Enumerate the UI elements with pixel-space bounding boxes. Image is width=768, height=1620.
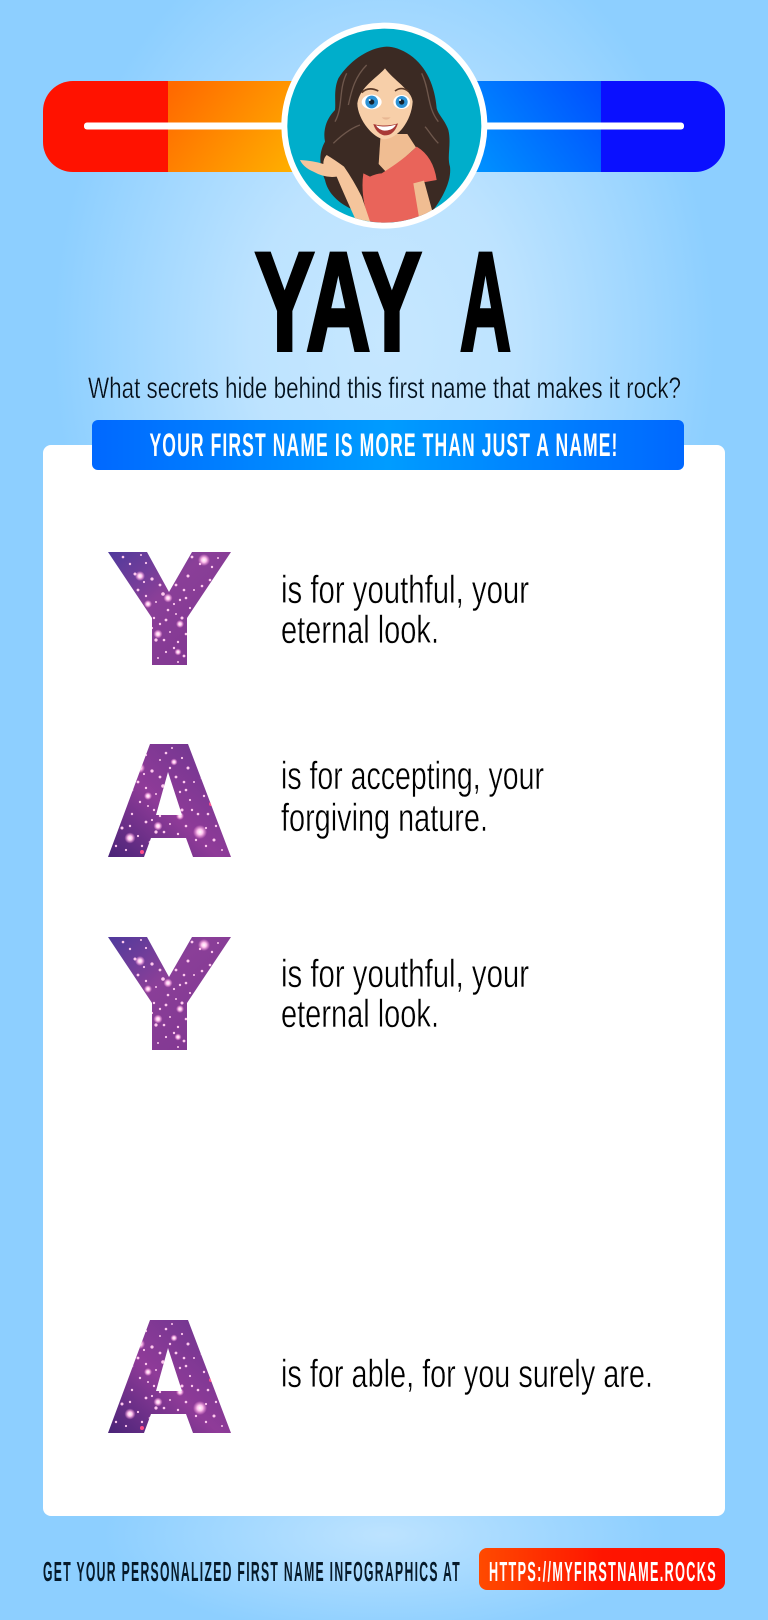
- title: YAY: [255, 223, 421, 380]
- footer url button: [479, 1548, 725, 1590]
- text: accepting: is for accepting, your: [281, 755, 544, 798]
- icon: galaxy letter Y: [108, 552, 231, 665]
- text: youthful: eternal look.: [281, 993, 439, 1036]
- text: youthful: eternal look.: [281, 609, 439, 652]
- letter row: Y youthful second: [108, 937, 529, 1050]
- icon: galaxy letter Y: [108, 937, 231, 1050]
- avatar: woman in teal circle: [284, 26, 484, 226]
- icon: galaxy letter A: [108, 1320, 231, 1433]
- text: youthful: is for youthful, your: [281, 569, 529, 612]
- letter row: Y youthful: [108, 552, 529, 665]
- icon: galaxy letter A: [108, 744, 231, 857]
- text: accepting: forgiving nature.: [281, 797, 488, 840]
- title: A: [460, 223, 511, 380]
- banner: [92, 420, 684, 470]
- letter row: A able: [108, 1320, 653, 1433]
- header colour bar: [43, 81, 725, 172]
- panel: white content card: [43, 445, 725, 1516]
- letter row: A accepting: [108, 744, 544, 857]
- text: youthful: is for youthful, your: [281, 953, 529, 996]
